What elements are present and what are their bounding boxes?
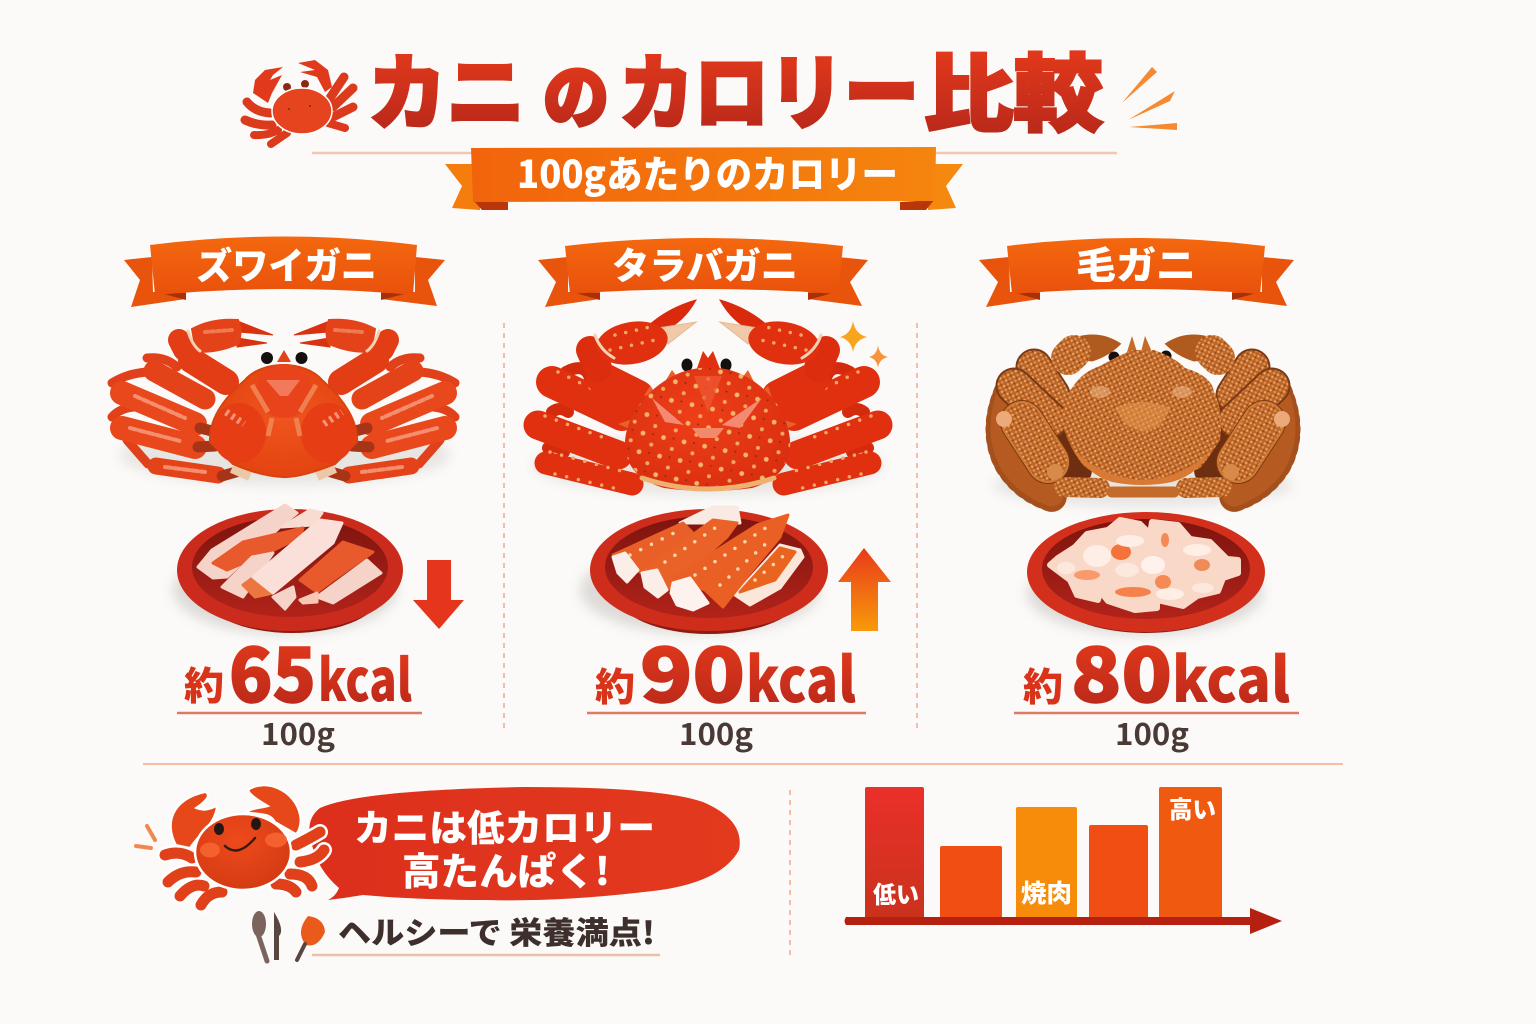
banner: ズワイガニ xyxy=(124,236,445,307)
front claw xyxy=(1022,422,1048,462)
meat pieces xyxy=(680,507,740,523)
banner label: タラバガニ xyxy=(612,236,798,290)
mascot legs xyxy=(165,832,324,905)
carapace xyxy=(210,365,357,477)
healthy note: ヘルシーで 栄養満点! xyxy=(338,908,655,953)
kcal value: ズワイガニ: 65 xyxy=(229,617,316,724)
crab: ズワイガニ xyxy=(112,320,455,485)
column dividers xyxy=(143,323,1343,958)
banner: タラバガニ xyxy=(538,236,868,307)
claw palm xyxy=(192,320,240,352)
banner label: ズワイガニ xyxy=(196,236,377,290)
mid legs xyxy=(1034,367,1052,395)
bar chart: 高い xyxy=(1169,790,1216,825)
carapace xyxy=(1061,350,1221,482)
speech bubble xyxy=(309,787,740,900)
mascot crab xyxy=(136,785,324,905)
bar chart xyxy=(844,787,1282,934)
mascot face xyxy=(214,823,224,835)
claw palm xyxy=(593,316,671,370)
kcal value: タラバガニ: 約 xyxy=(595,657,635,713)
kcal value: タラバガニ xyxy=(587,617,866,754)
amount label: 100g xyxy=(1115,710,1189,754)
shadow behind legs xyxy=(1040,385,1075,470)
amount label: 100g xyxy=(261,710,335,754)
claw arm xyxy=(191,360,226,382)
bubble text: カニは低カロリー xyxy=(354,798,655,852)
crab: 毛ガニ xyxy=(993,336,1293,507)
claw arm xyxy=(602,378,638,396)
kcal value: ズワイガニ: 約 xyxy=(184,656,224,712)
thin upper leg segments xyxy=(112,358,177,464)
rear segments xyxy=(1064,487,1100,488)
title: 比較 xyxy=(924,28,1103,149)
icon: title crab xyxy=(245,60,353,144)
icon: title spark lines xyxy=(1122,67,1177,130)
subtitle text: 100gあたりのカロリー xyxy=(517,144,898,199)
meat xyxy=(198,505,297,578)
plate: ズワイガニ xyxy=(173,505,403,634)
eyes xyxy=(261,352,273,364)
kcal value: 毛ガニ: kcal xyxy=(1172,630,1290,720)
arrow: down xyxy=(413,560,464,629)
base joint xyxy=(232,468,250,476)
kcal value: 毛ガニ: 約 xyxy=(1023,657,1063,713)
knuckle segments xyxy=(548,368,590,452)
top claw xyxy=(1076,336,1119,360)
title: カロリー xyxy=(619,27,919,146)
eyes xyxy=(682,358,692,372)
crab: タラバガニ xyxy=(533,300,883,495)
kcal value: タラバガニ: kcal xyxy=(746,630,856,720)
amount label: 100g xyxy=(679,710,753,754)
speech bubble: 高たんぱく! xyxy=(402,841,610,896)
plate: タラバガニ xyxy=(580,507,828,634)
banner: 毛ガニ xyxy=(979,235,1294,307)
title xyxy=(368,27,1103,149)
legs xyxy=(552,382,622,415)
arrow: up xyxy=(838,548,891,631)
outer spiny leg xyxy=(1000,385,1052,497)
banner label: 毛ガニ xyxy=(1076,235,1196,290)
kcal value: ズワイガニ: kcal xyxy=(318,634,412,718)
kcal value: タラバガニ: 90 xyxy=(640,617,745,724)
plate: 毛ガニ xyxy=(1027,512,1265,635)
rostrum spikes xyxy=(1127,336,1152,352)
meat xyxy=(1050,520,1238,610)
claw pincers xyxy=(239,322,273,335)
icon: sparkles xyxy=(840,321,888,368)
pincers xyxy=(648,300,696,332)
legs xyxy=(154,371,205,399)
bar chart: 焼肉 xyxy=(1021,874,1072,910)
icon: cutlery xyxy=(252,911,325,961)
bar labels: 低い xyxy=(873,875,919,910)
subtitle ribbon xyxy=(312,144,1117,210)
eyes xyxy=(1108,352,1120,362)
rostrum spike xyxy=(695,351,722,374)
carapace xyxy=(618,370,797,430)
title: カニ xyxy=(368,27,525,146)
chart axis arrow xyxy=(844,908,1282,934)
kcal value: 毛ガニ: 80 xyxy=(1071,617,1172,724)
title: の xyxy=(543,42,609,143)
mascot body xyxy=(195,814,291,890)
kcal value: 毛ガニ xyxy=(1014,617,1299,754)
kcal value: ズワイガニ xyxy=(177,617,422,754)
mascot claws xyxy=(171,792,217,848)
